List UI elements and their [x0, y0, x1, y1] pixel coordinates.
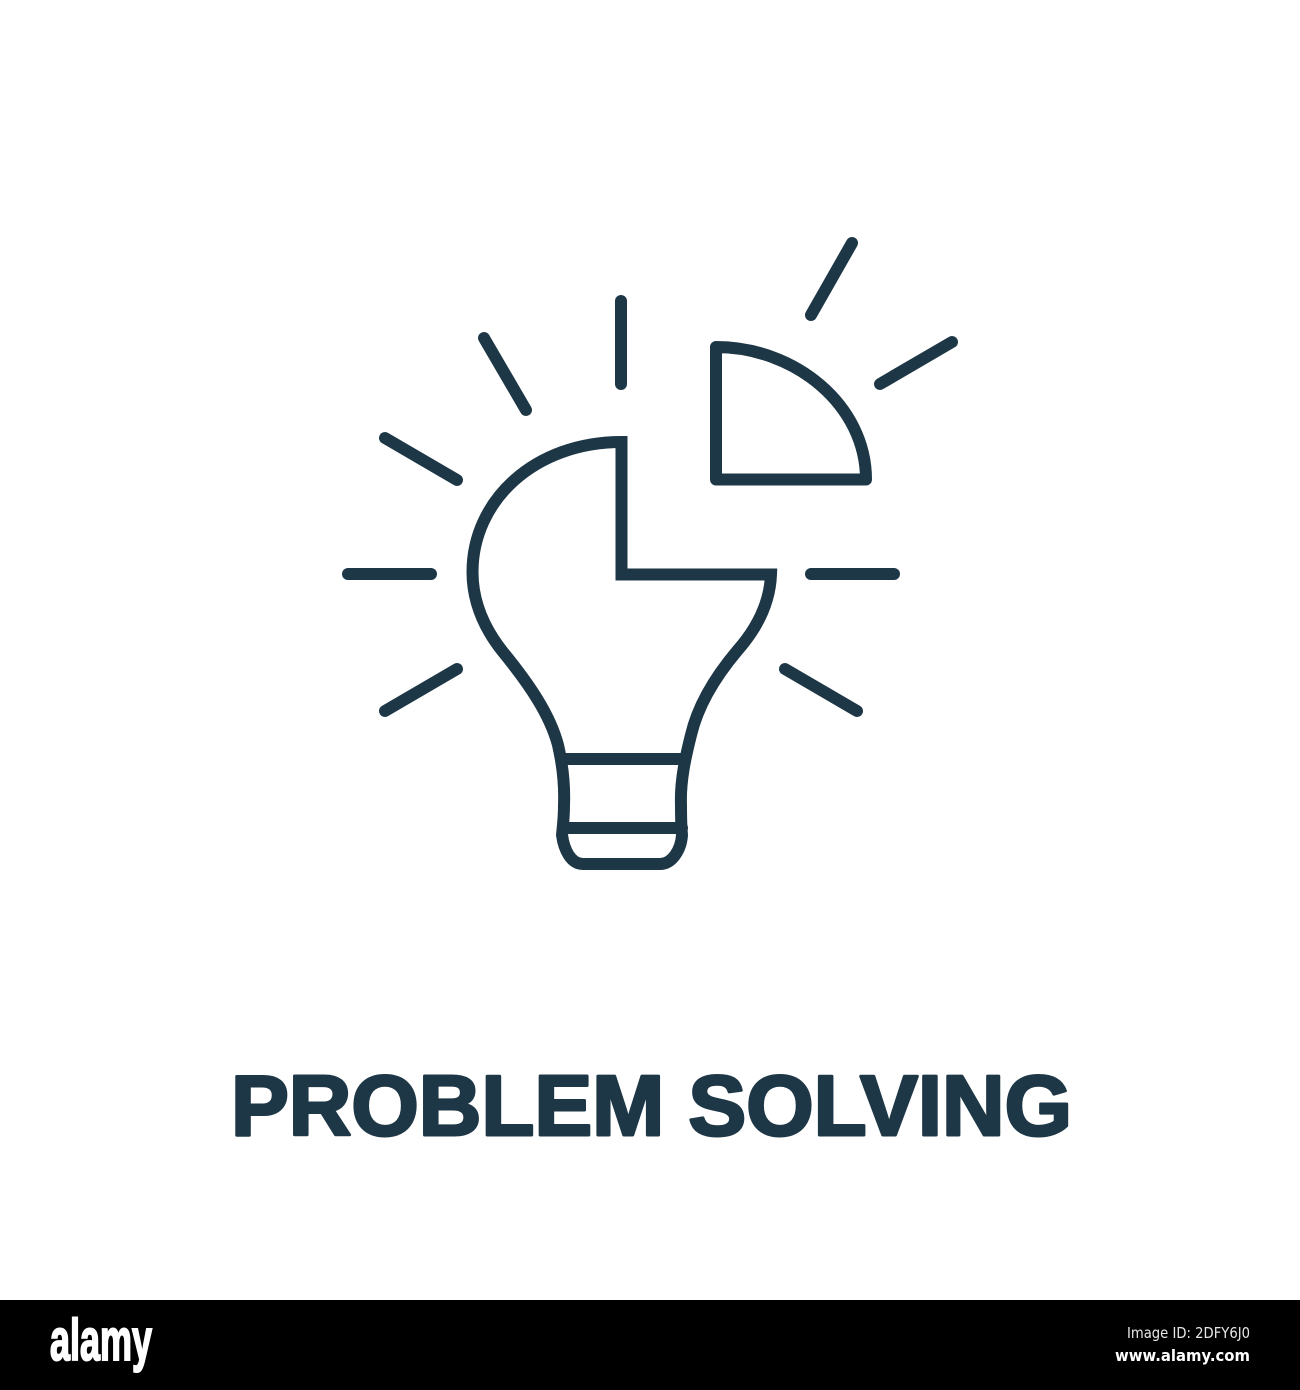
icon: bulb base upper bar [563, 753, 684, 765]
icon: bulb body with missing quarter [472, 442, 771, 864]
icon: problem solving light bulb [348, 243, 952, 864]
icon: detached quarter piece [716, 347, 866, 480]
footer website: www.alamy.com [1115, 1346, 1250, 1365]
footer logo: alamy: alamy [50, 1308, 152, 1373]
title: PROBLEM SOLVING [231, 1059, 1072, 1154]
icon: light rays [348, 243, 952, 711]
footer bar [0, 1300, 1300, 1390]
footer image id: Image ID: 2DFY6J0 [1127, 1324, 1250, 1342]
icon: bulb base lower bar [565, 822, 682, 834]
